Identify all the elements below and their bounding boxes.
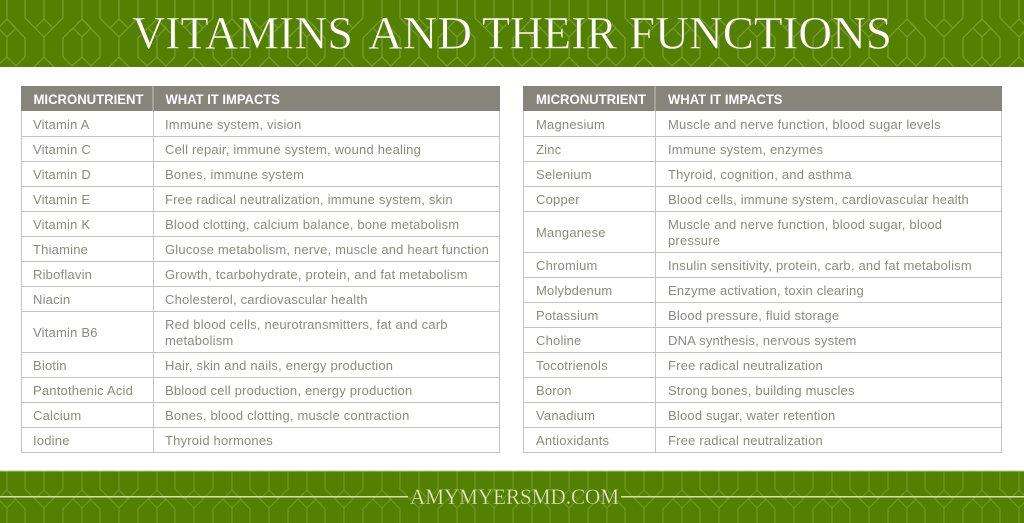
title: VITAMINS [132,8,353,60]
table rows: Insulin sensitivity, protein, carb, and fat metabolism [668,258,972,273]
table rows: Choline [536,333,582,348]
table rows [21,111,500,452]
table rows: Molybdenum [536,283,612,298]
table rows: Vitamin B6 [33,325,98,340]
table header [523,86,1002,111]
table rows: Vitamin A [33,117,90,132]
table rows: Tocotrienols [536,358,608,373]
table rows: Vitamin E [33,192,90,207]
table rows: Bones, immune system [165,167,304,182]
table rows: Free radical neutralization, immune system, skin [165,192,453,207]
table rows: Blood clotting, calcium balance, bone metabolism [165,217,459,232]
table rows: Manganese [536,225,606,240]
table rows: Cell repair, immune system, wound healing [165,142,421,157]
table header: MICRONUTRIENT [34,91,144,107]
table rows: pressure [668,233,720,248]
table rows: Blood cells, immune system, cardiovascular health [668,192,969,207]
table rows: Strong bones, building muscles [668,383,855,398]
table rows: Vanadium [536,408,595,423]
table rows: Magnesium [536,117,605,132]
title: FUNCTIONS [629,8,892,60]
table rows: Calcium [33,408,81,423]
table rows: Blood pressure, fluid storage [668,308,839,323]
table rows: Chromium [536,258,598,273]
table rows: Pantothenic Acid [33,383,133,398]
title banner [0,0,1024,67]
table rows: Vitamin K [33,217,90,232]
table rows: Riboflavin [33,267,92,282]
table rows: Selenium [536,167,592,182]
footer banner [0,470,1024,523]
title: AND [368,8,472,60]
table rows: Muscle and nerve function, blood sugar, blood [668,217,942,232]
table rows: metabolism [165,333,233,348]
title: THEIR [482,8,618,60]
table rows: Immune system, vision [165,117,301,132]
table rows: DNA synthesis, nervous system [668,333,857,348]
table rows: Immune system, enzymes [668,142,824,157]
table rows: Vitamin C [33,142,91,157]
table rows: Thiamine [33,242,88,257]
table rows: Antioxidants [536,433,610,448]
table rows: Boron [536,383,572,398]
title [132,8,892,60]
table rows: Free radical neutralization [668,433,823,448]
table rows: Potassium [536,308,598,323]
table header: WHAT IT IMPACTS [166,91,280,107]
table rows: Enzyme activation, toxin clearing [668,283,864,298]
table rows: Hair, skin and nails, energy production [165,358,393,373]
table header [21,86,500,111]
table rows: Red blood cells, neurotransmitters, fat and carb [165,317,448,332]
table rows: Blood sugar, water retention [668,408,835,423]
table rows: Glucose metabolism, nerve, muscle and heart function [165,242,489,257]
table rows: Iodine [33,433,70,448]
table rows: Cholesterol, cardiovascular health [165,292,368,307]
table rows [523,111,1002,452]
table rows: Biotin [33,358,67,373]
panel: vitamins table [21,86,500,452]
table rows: Free radical neutralization [668,358,823,373]
table header: MICRONUTRIENT [536,91,646,107]
website address: AMYMYERSMD.COM [410,484,619,509]
table rows: Thyroid, cognition, and asthma [668,167,852,182]
table rows: Copper [536,192,580,207]
table rows: Growth, tcarbohydrate, protein, and fat metabolism [165,267,468,282]
table rows: Vitamin D [33,167,91,182]
table rows: Bblood cell production, energy production [165,383,412,398]
panel: minerals table [523,86,1002,452]
table rows: Bones, blood clotting, muscle contraction [165,408,410,423]
table rows: Zinc [536,142,562,157]
table rows: Muscle and nerve function, blood sugar levels [668,117,941,132]
table rows: Thyroid hormones [165,433,273,448]
table header: WHAT IT IMPACTS [668,91,782,107]
table rows: Niacin [33,292,70,307]
